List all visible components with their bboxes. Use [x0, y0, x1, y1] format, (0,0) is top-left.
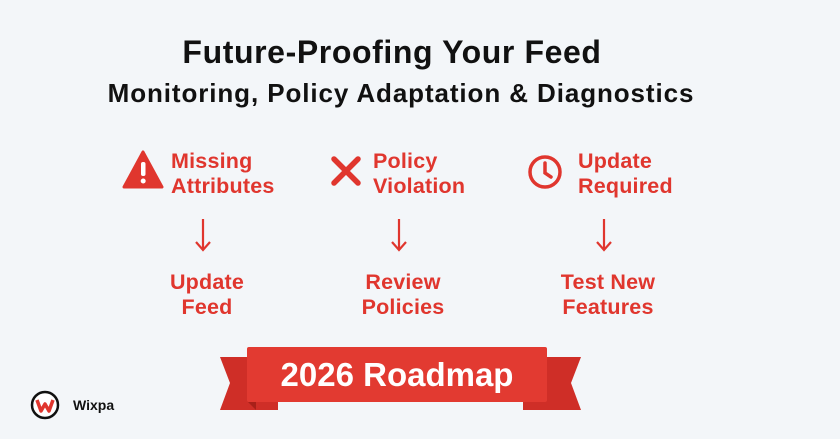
- text: Review Policies: Review: [365, 270, 441, 294]
- icon: clock: [528, 155, 562, 189]
- subtitle: Monitoring, Policy Adaptation & Diagnostics: [108, 78, 694, 108]
- icon: cross: [331, 156, 361, 186]
- arrow 3: [596, 219, 612, 252]
- title: Future-Proofing Your Feed: [182, 34, 602, 70]
- logo: Wixpa: [30, 390, 114, 420]
- text: Test New Features: Features: [562, 295, 654, 319]
- text: Missing Attributes: [171, 149, 275, 198]
- banner: 2026 Roadmap: [220, 347, 581, 410]
- text: Missing Attributes: Missing: [171, 149, 252, 173]
- arrow 2: [391, 219, 407, 252]
- text: Review Policies: [362, 270, 444, 319]
- text: Missing Attributes: Attributes: [171, 174, 275, 198]
- text: Update Feed: Feed: [182, 295, 232, 319]
- text: Policy Violation: Violation: [373, 174, 465, 198]
- banner text: 2026 Roadmap: [281, 356, 513, 393]
- text: Update Required: [578, 149, 673, 198]
- text: Policy Violation: Policy: [373, 149, 438, 173]
- text: Test New Features: Test New: [561, 270, 655, 294]
- text: Test New Features: [561, 270, 655, 319]
- icon: warning: [122, 150, 164, 188]
- text: Update Required: Update: [578, 149, 652, 173]
- text: Update Required: Required: [578, 174, 673, 198]
- logo: Wixpa: Wixpa: [73, 397, 114, 413]
- text: Policy Violation: [373, 149, 465, 198]
- text: Update Feed: Update: [170, 270, 244, 294]
- text: Update Feed: [170, 270, 244, 319]
- text: Review Policies: Policies: [362, 295, 444, 319]
- arrow 1: [195, 219, 211, 252]
